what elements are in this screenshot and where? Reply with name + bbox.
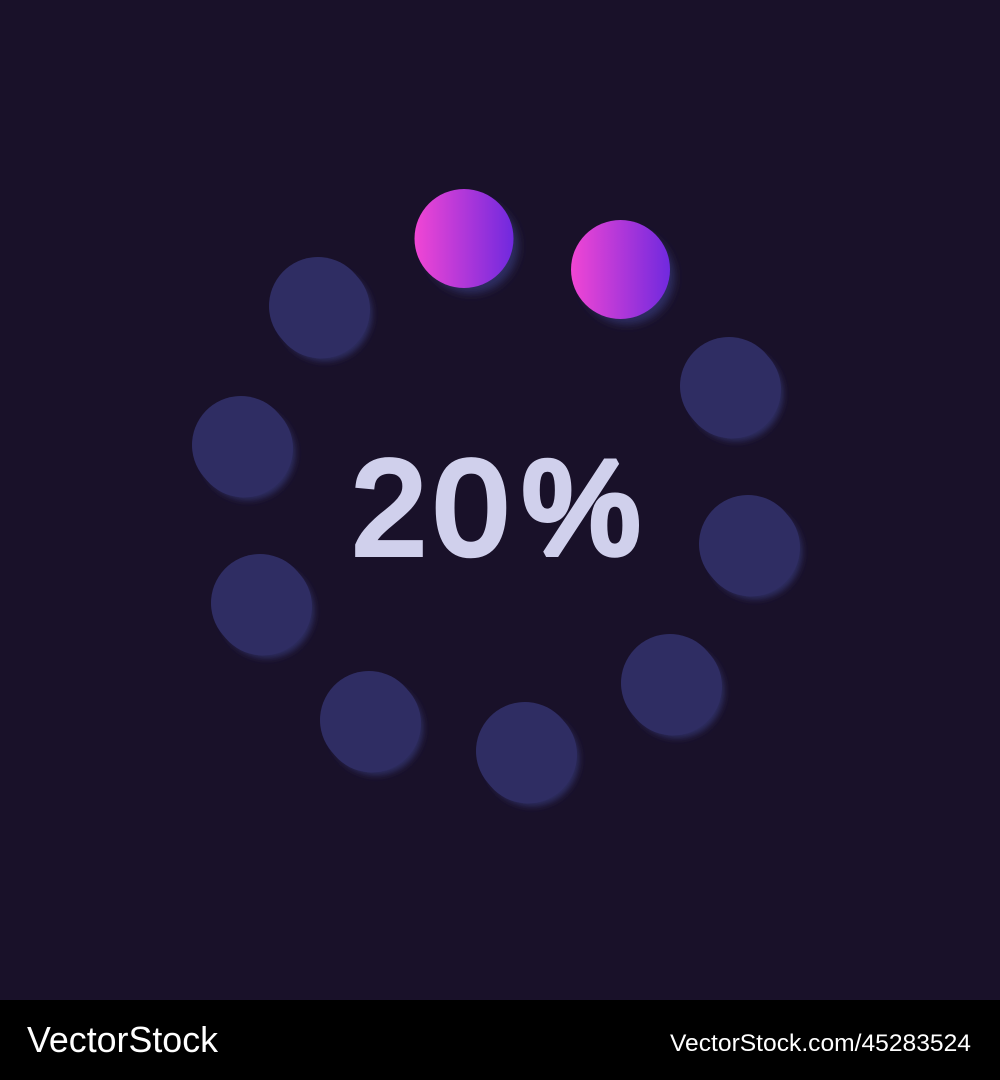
inactive dot 10 [278, 267, 372, 361]
inactive dot 5 [630, 644, 724, 738]
active dot 1 [414, 189, 518, 293]
inactive dot 6 [485, 712, 579, 806]
footer image id: VectorStock.com/45283524 [670, 1030, 971, 1057]
percentage label: 2 [352, 434, 426, 582]
inactive dot 4 [708, 505, 802, 599]
inactive dot 7 [329, 681, 423, 775]
inactive dot 3 [689, 347, 783, 441]
inactive dot 8 [220, 564, 314, 658]
footer bar [0, 1000, 1000, 1080]
percentage label: 0 [434, 434, 508, 582]
percentage label: % [522, 434, 640, 582]
footer brand: VectorStock [27, 1019, 219, 1060]
active dot 2 [571, 220, 674, 324]
inactive dot 9 [201, 406, 295, 500]
